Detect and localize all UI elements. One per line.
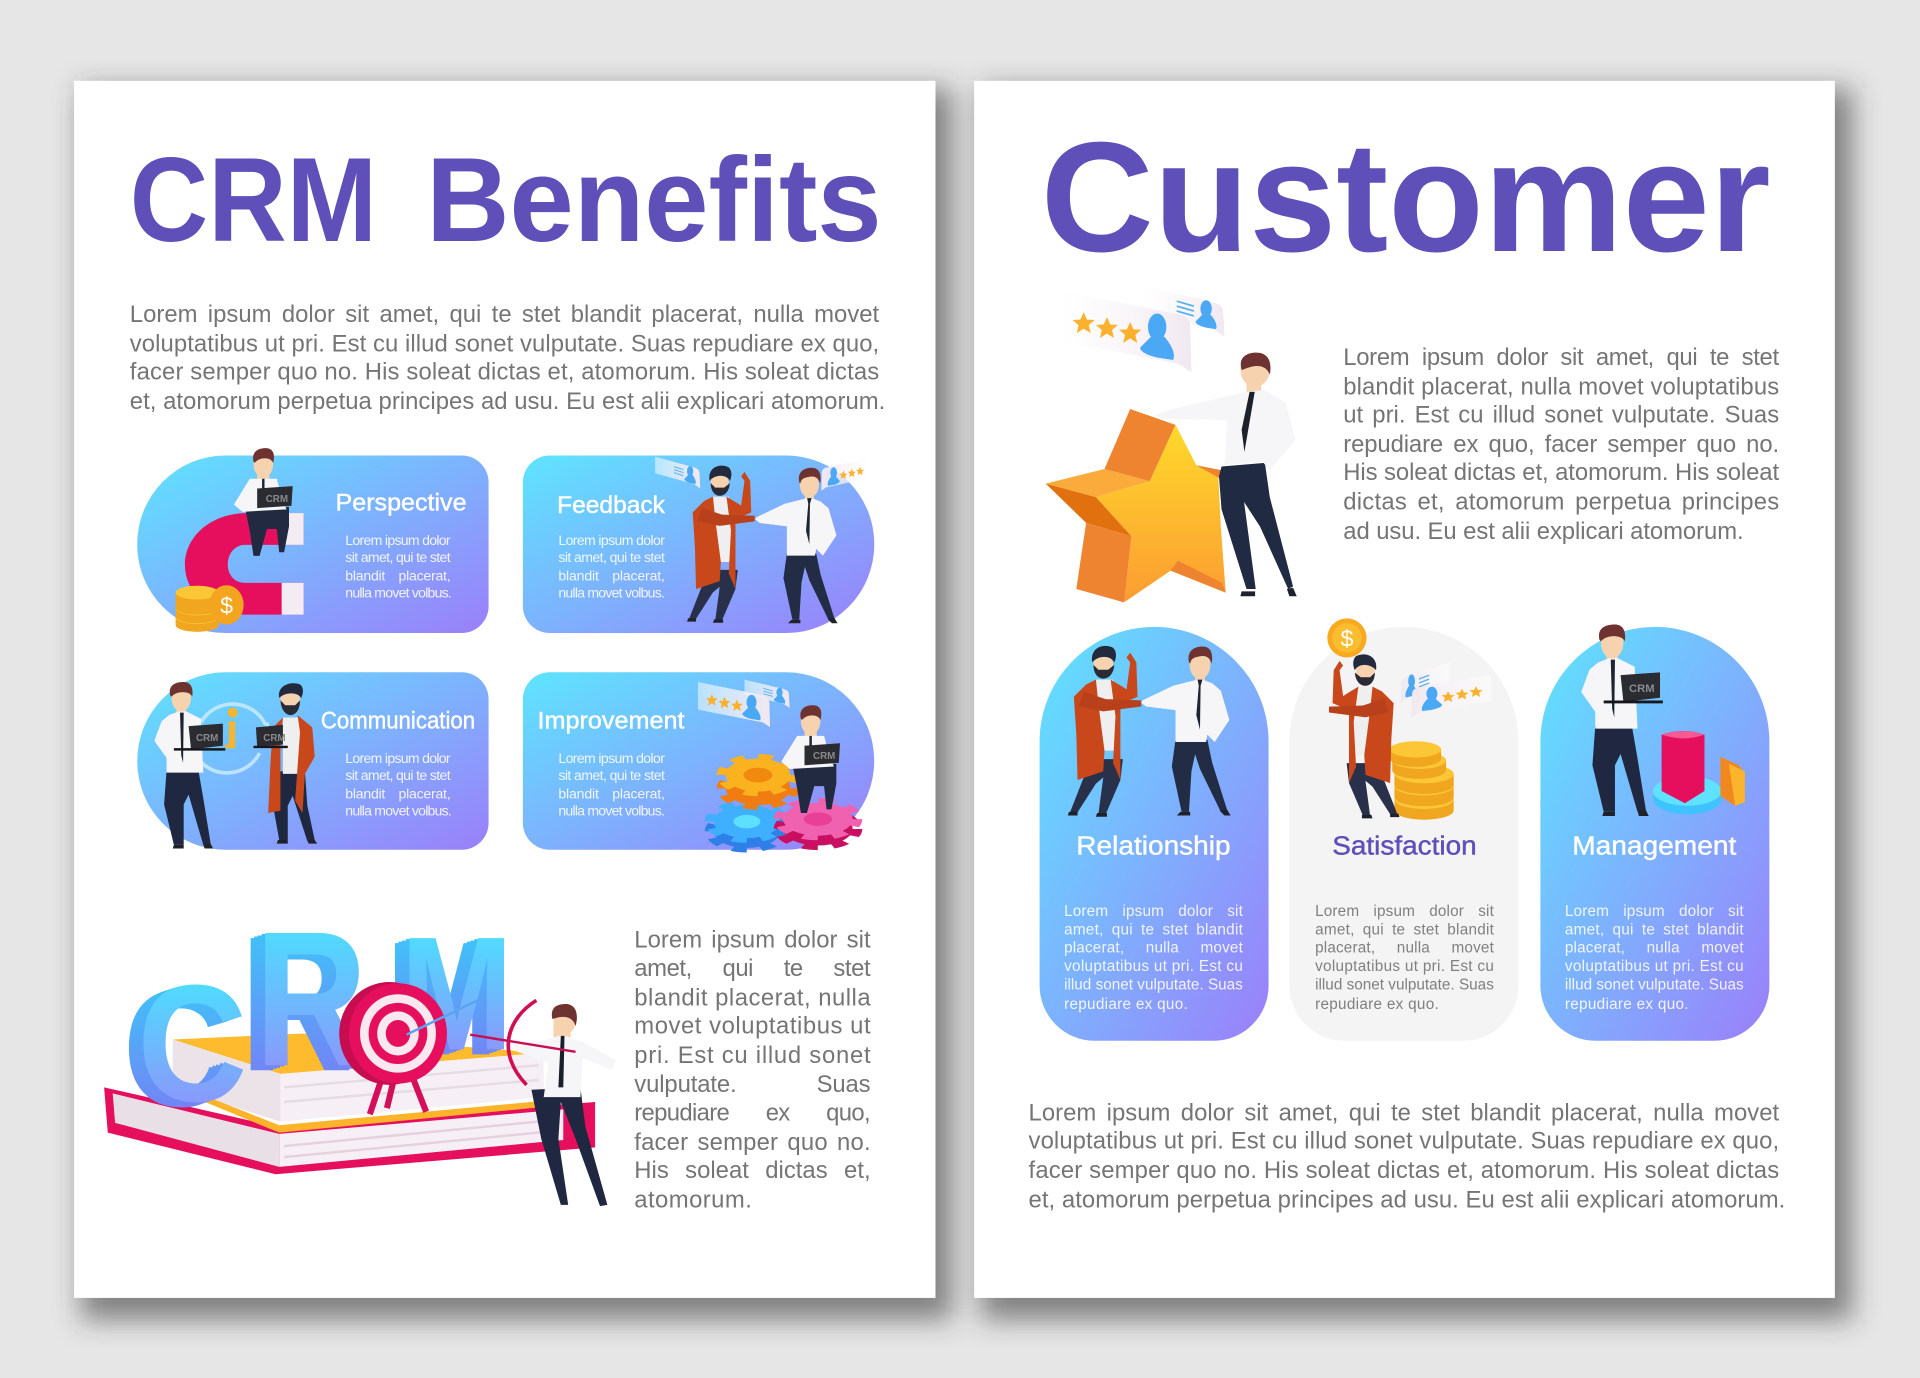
text: Satisfaction body: Lorem ipsum dolor sit: [1315, 903, 1495, 920]
text: Communication body: nulla movet volbus.: [345, 802, 452, 818]
text: Satisfaction body: voluptatibus ut pri. Est cu: [1315, 958, 1494, 975]
text: Satisfaction body: [1315, 903, 1495, 1013]
text: Management body: illud sonet vulputate. Suas: [1565, 976, 1744, 993]
intro paragraph: [130, 301, 885, 415]
bottom right paragraph: Lorem ipsum dolor sit amet, qui te stet blandit placerat, nulla movet: [1029, 1099, 1780, 1126]
right intro paragraph: blandit placerat, nulla movet voluptatibus: [1343, 373, 1779, 400]
icon: info: [225, 708, 238, 748]
right intro paragraph: dictas et, atomorum perpetua principes: [1343, 488, 1779, 515]
heading: Perspective: Perspective: [336, 490, 467, 517]
text: Management body: Lorem ipsum dolor sit: [1565, 903, 1744, 920]
text: Relationship body: illud sonet vulputate. Suas: [1064, 976, 1243, 993]
card: Management: [1540, 624, 1769, 1041]
icon: chart: [1653, 731, 1745, 814]
right intro paragraph: Lorem ipsum dolor sit amet, qui te stet: [1343, 344, 1780, 371]
icon: review bubble lines: [1142, 285, 1224, 337]
heading: Management: Management: [1572, 833, 1736, 861]
lower left paragraph: Lorem ipsum dolor sit: [634, 927, 871, 954]
title: CRM Benefits: CRM: [130, 133, 377, 267]
icon: coin stack: [1390, 741, 1454, 820]
lower left paragraph: movet voluptatibus ut: [634, 1012, 871, 1039]
heading: Communication: Communication: [321, 708, 475, 735]
lower left paragraph: amet, qui te stet: [634, 955, 871, 982]
bottom right paragraph: facer semper quo no. His soleat dictas et, atomorum. His soleat dictas: [1029, 1157, 1779, 1184]
heading: Satisfaction: Satisfaction: [1332, 833, 1477, 861]
text: Perspective body: [345, 532, 452, 601]
text: Relationship body: amet, qui te stet blandit: [1064, 921, 1244, 938]
lower left paragraph: facer semper quo no.: [634, 1129, 871, 1156]
figure: man in coat: [1068, 646, 1141, 817]
text: Feedback body: [558, 532, 665, 601]
text: Improvement body: [558, 750, 665, 818]
icon: magnet: [185, 513, 304, 615]
figure: man in shirt: [755, 468, 838, 623]
text: Improvement body: blandit placerat,: [558, 785, 665, 801]
text: Perspective body: sit amet, qui te stet: [345, 549, 451, 565]
icon: review bubble lines: [655, 457, 700, 489]
lower left paragraph: pri. Est cu illud sonet: [634, 1042, 871, 1069]
figure: man in coat: [687, 466, 755, 623]
icon: cycle arrows: [198, 704, 268, 773]
text: Improvement body: sit amet, qui te stet: [558, 767, 665, 783]
text: Management body: placerat, nulla movet: [1565, 940, 1744, 957]
text: Satisfaction body: illud sonet vulputate. Suas: [1315, 976, 1494, 993]
lower left paragraph: blandit placerat, nulla: [634, 984, 871, 1011]
title: Customer: Customer: [1041, 110, 1771, 285]
title: CRM Benefits: Benefits: [426, 133, 882, 267]
card: Feedback: [523, 455, 874, 633]
card: Satisfaction: [1289, 618, 1518, 1041]
text: Perspective body: blandit placerat,: [345, 567, 451, 583]
panel: right page: [974, 81, 1835, 1298]
text: Communication body: blandit placerat,: [345, 785, 451, 801]
intro paragraph: Lorem ipsum dolor sit amet, qui te stet blandit placerat, nulla movet: [130, 301, 880, 328]
bottom right paragraph: [1029, 1099, 1785, 1213]
figure: man in coat with laptop: [253, 683, 317, 844]
text: Relationship body: placerat, nulla movet: [1064, 940, 1244, 957]
lower left paragraph: repudiare ex quo,: [634, 1099, 871, 1126]
figure: man with laptop on magnet: [234, 448, 293, 556]
icon: review bubble stars: [698, 682, 770, 727]
icon: dollar coin: $: [1340, 626, 1353, 652]
heading: Relationship: Relationship: [1076, 833, 1231, 861]
right intro paragraph: ad usu. Eu est alii explicari atomorum.: [1343, 518, 1744, 545]
illustration: star and man: [1046, 285, 1297, 602]
text: Feedback body: nulla movet volbus.: [558, 585, 665, 601]
3D letters CRM: R: [255, 891, 367, 1106]
text: Feedback body: blandit placerat,: [558, 567, 665, 583]
upper book: [173, 1033, 544, 1133]
figure: man at star: [1155, 353, 1297, 596]
text: Management body: amet, qui te stet blandit: [1565, 921, 1744, 938]
text: Satisfaction body: amet, qui te stet blandit: [1315, 921, 1495, 938]
lower left paragraph: vulputate. Suas: [634, 1071, 871, 1098]
figure: man in shirt: [1141, 647, 1231, 815]
card: Communication: [137, 672, 489, 850]
bottom right paragraph: voluptatibus ut pri. Est cu illud sonet vulputate. Suas repudiare ex quo,: [1029, 1128, 1779, 1155]
lower book: [104, 1087, 595, 1174]
right intro paragraph: His soleat dictas et, atomorum. His soleat: [1343, 459, 1780, 486]
icon: review bubbles: [1401, 662, 1491, 717]
right intro paragraph: [1343, 344, 1780, 545]
text: Relationship body: [1064, 903, 1244, 1013]
text: Improvement body: nulla movet volbus.: [558, 802, 665, 818]
text: Satisfaction body: placerat, nulla movet: [1315, 940, 1495, 957]
text: Communication body: sit amet, qui te stet: [345, 767, 451, 783]
text: Management body: voluptatibus ut pri. Est cu: [1565, 958, 1744, 975]
right intro paragraph: repudiare ex quo, facer semper quo no.: [1343, 431, 1779, 458]
lower left paragraph: His soleat dictas et,: [634, 1157, 871, 1184]
lower left paragraph: atomorum.: [634, 1186, 752, 1213]
icon: dollar coin: [1327, 618, 1367, 658]
text: Satisfaction body: repudiare ex quo.: [1315, 996, 1439, 1013]
text: Management body: repudiare ex quo.: [1565, 996, 1689, 1013]
icon: coins: $: [220, 592, 233, 618]
card: Relationship: [1040, 627, 1269, 1041]
3D letters CRM: [137, 891, 513, 1137]
text: Relationship body: repudiare ex quo.: [1064, 996, 1188, 1013]
figure: man with laptop: [1581, 624, 1663, 816]
text: Perspective body: nulla movet volbus.: [345, 585, 452, 601]
right intro paragraph: ut pri. Est cu illud sonet vulputate. Suas: [1343, 401, 1779, 428]
text: Improvement body: Lorem ipsum dolor: [558, 750, 665, 766]
figure: man with laptop: [154, 682, 225, 849]
text: Feedback body: sit amet, qui te stet: [558, 549, 665, 565]
icon: gears: [710, 757, 857, 850]
lower left paragraph: [634, 927, 871, 1213]
heading: Feedback: Feedback: [557, 492, 665, 519]
intro paragraph: et, atomorum perpetua principes ad usu. Eu est alii explicari atomorum.: [130, 388, 885, 415]
card: Perspective: [137, 448, 489, 633]
3D letters CRM: M: [400, 904, 513, 1084]
bottom right paragraph: et, atomorum perpetua principes ad usu. Eu est alii explicari atomorum.: [1029, 1186, 1785, 1213]
icon: coins: [176, 585, 244, 632]
figure: man with laptop on gears: [781, 705, 840, 813]
intro paragraph: facer semper quo no. His soleat dictas et, atomorum. His soleat dictas: [130, 359, 879, 386]
text: Communication body: [345, 750, 452, 818]
panel: left page: [74, 81, 936, 1298]
figure: man in coat: [1329, 654, 1400, 818]
heading: Improvement: Improvement: [538, 708, 685, 735]
text: Feedback body: Lorem ipsum dolor: [558, 532, 665, 548]
icon: review bubble stars: [1058, 290, 1191, 372]
icon: review bubble lines: [744, 680, 790, 708]
text: Communication body: Lorem ipsum dolor: [345, 750, 451, 766]
text: Relationship body: voluptatibus ut pri. Est cu: [1064, 958, 1243, 975]
target: [339, 982, 478, 1114]
text: Perspective body: Lorem ipsum dolor: [345, 532, 451, 548]
text: Management body: [1565, 903, 1744, 1013]
intro paragraph: voluptatibus ut pri. Est cu illud sonet vulputate. Suas repudiare ex quo,: [130, 330, 879, 357]
card: Improvement: [523, 672, 874, 850]
3D letters CRM: C: [137, 951, 247, 1137]
figure: archer: [470, 1000, 616, 1206]
icon: review bubble stars: [821, 458, 869, 491]
star: [1046, 409, 1226, 602]
text: Relationship body: Lorem ipsum dolor sit: [1064, 903, 1244, 920]
illustration: CRM books and target: [104, 891, 616, 1206]
